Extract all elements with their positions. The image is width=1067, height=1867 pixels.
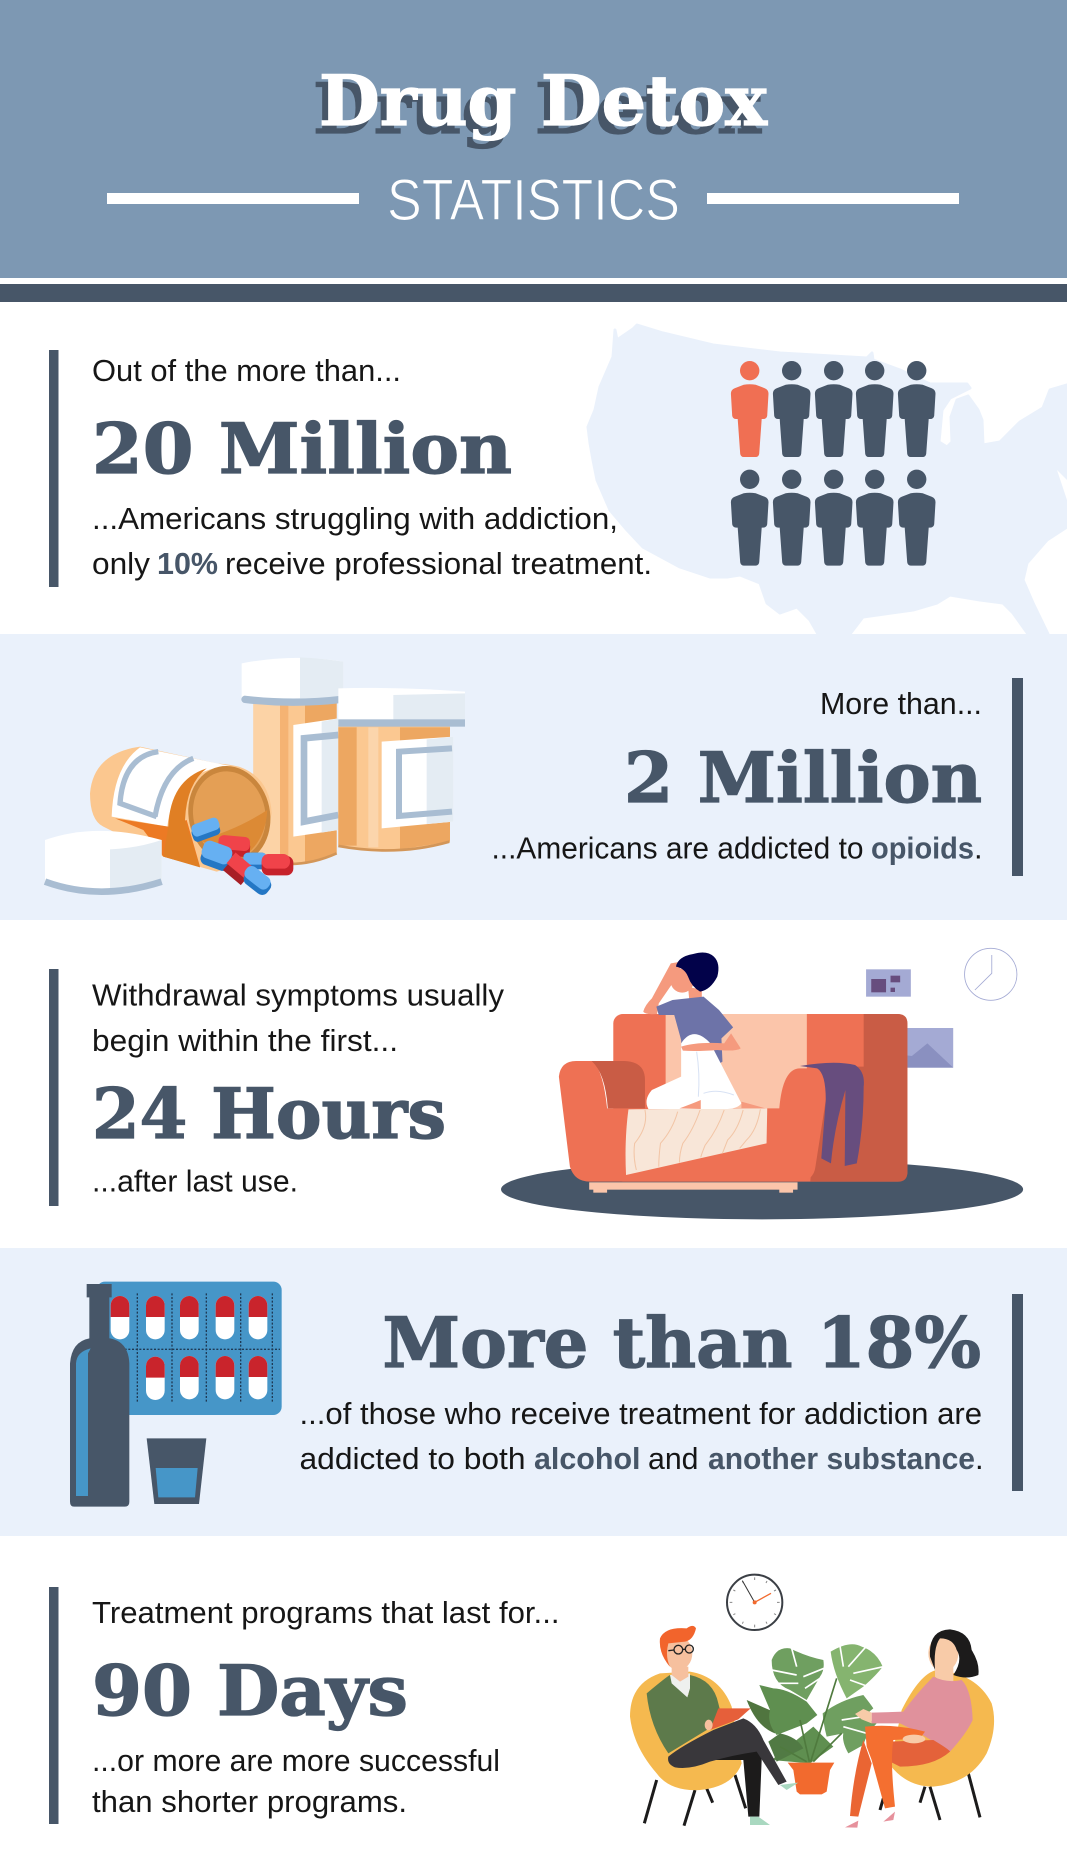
text: withdrawal symptoms: begin within the first... [92, 1023, 398, 1058]
icon: ten people, one highlighted [731, 361, 936, 566]
header dark band [0, 284, 1067, 302]
map of the United States [588, 325, 1067, 634]
accent bar [49, 1587, 58, 1824]
panel: 90 days [49, 1575, 994, 1828]
text: of those who receive treatment [300, 1396, 984, 1476]
text: after last use: ...after last use. [92, 1164, 298, 1198]
stat: 90 days: 90 Days [92, 1651, 408, 1732]
illustration: pill bottles [45, 657, 465, 898]
title: Drug Detox: Drug Detox [313, 69, 762, 150]
text: out of the more than: Out of the more than... [92, 353, 401, 388]
text: of those who receive treatment: ...of those who receive treatment for addiction are [300, 1396, 982, 1431]
text: of those who receive treatment: addicted to both [300, 1441, 526, 1476]
text: americans addicted to opioids: . [974, 830, 983, 866]
stat: more than 18%: More than 18% [382, 1303, 981, 1384]
text: americans struggling: only [92, 546, 151, 581]
panel background [0, 634, 1067, 920]
header background [0, 0, 1067, 278]
stat: 24 hours: 24 Hours [92, 1074, 446, 1155]
text: withdrawal symptoms: Withdrawal symptoms usually [92, 978, 504, 1012]
panel: 24 hours [49, 948, 1023, 1219]
text: of those who receive treatment: . [975, 1441, 984, 1476]
panel: 20 million [49, 325, 1067, 634]
text: treatment programs: Treatment programs that last for... [92, 1595, 560, 1630]
text: americans addicted to opioids: opioids [871, 830, 974, 866]
panel background [0, 1248, 1067, 1536]
accent bar [49, 969, 58, 1206]
title: Drug Detox: Drug Detox [319, 61, 768, 142]
text: americans struggling [92, 501, 652, 581]
panel: header [0, 0, 1067, 302]
text: or more are more successful [92, 1743, 500, 1819]
accent bar [1012, 678, 1023, 876]
text: more than: More than... [820, 686, 982, 721]
text: or more are more successful: than shorter programs. [92, 1784, 407, 1819]
text: of those who receive treatment: alcohol [534, 1441, 640, 1476]
subtitle: statistics with rules [107, 168, 959, 233]
text: of those who receive treatment: and [648, 1441, 698, 1476]
text: withdrawal symptoms [92, 978, 504, 1058]
stat: 2 million: 2 Million [624, 738, 982, 819]
illustration: woman on sofa [501, 948, 1023, 1219]
subtitle: statistics with rules: STATISTICS [387, 168, 680, 233]
panel: 2 million [0, 634, 1067, 920]
illustration: blister pack, bottle and glass [70, 1282, 282, 1507]
accent bar [49, 350, 58, 587]
text: americans struggling: receive professional treatment. [225, 546, 652, 581]
illustration: therapy session [630, 1575, 994, 1828]
text: americans struggling: ...Americans struggling with addiction, [92, 501, 618, 536]
text: americans addicted to opioids: ...Americans are addicted to [492, 830, 864, 866]
stat: 20 million: 20 Million [92, 409, 512, 490]
accent bar [1012, 1294, 1023, 1491]
text: or more are more successful: ...or more are more successful [92, 1743, 500, 1778]
text: of those who receive treatment: another substance [708, 1441, 975, 1476]
panel: more than 18% [0, 1248, 1067, 1536]
text: americans struggling: 10% [157, 546, 218, 581]
